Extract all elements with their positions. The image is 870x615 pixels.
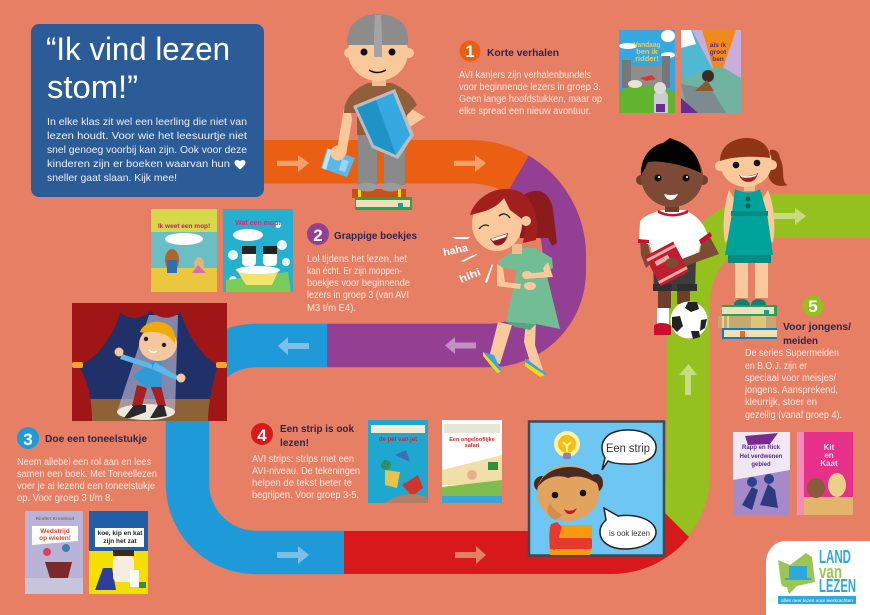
icon: shield (353, 89, 414, 159)
number badge (251, 423, 273, 445)
title: “Ik vind lezen (46, 31, 230, 67)
curtains (72, 303, 227, 421)
body text: gezellig (vanaf groep 4). (745, 410, 842, 421)
character: boy with book and ball (636, 138, 719, 339)
body text: jongens. Aansprekend, (744, 385, 838, 396)
book cover: de pet van jet (368, 420, 428, 503)
logo wordmark: van (819, 562, 842, 582)
intro text: snel genoeg voorbij kan zijn. Ook voor deze (47, 144, 247, 156)
number badge: 3 (23, 430, 33, 449)
book cover: Kit en Kaat (797, 432, 853, 515)
number badge: 4 (257, 426, 267, 445)
body text: samen een boek. Met Toneellezen (17, 469, 157, 480)
body text: boekjes voor beginnende (307, 278, 410, 289)
icon: tv-book (778, 553, 815, 594)
icon: soccer ball (670, 302, 708, 339)
intro text (47, 116, 247, 184)
step 2: grappige boekjes (151, 209, 417, 314)
book cover: Kit en Kaat: en (824, 451, 834, 460)
heading: lezen! (280, 437, 309, 449)
body text: AVI kanjers zijn verhalenbundels (459, 70, 591, 81)
heading: Doe een toneelstukje (45, 433, 147, 445)
logo wordmark: LAND (819, 547, 851, 567)
heading: Een strip is ook (280, 423, 354, 435)
body text: voor beginnende lezers in groep 3. (459, 82, 601, 93)
body text: Geen lange hoofdstukken, maar op (459, 94, 602, 105)
body text: kan écht. Er zijn moppen- (307, 266, 402, 277)
heading: Voor jongens/ (783, 321, 851, 333)
body text: op. Voor groep 3 t/m 8. (17, 493, 113, 504)
character: thinking boy (534, 465, 603, 555)
body text: voer je al lezend een toneelstukje (17, 481, 155, 492)
book cover: als ik groot ben: ben (712, 56, 724, 63)
step 3: toneelstukje (17, 427, 157, 594)
number badge (802, 296, 824, 316)
book cover: Het verdwenen gebied: gebied (751, 462, 771, 468)
laughing sounds: haha (442, 242, 469, 259)
book cover: Wedstrijd op wielen: Wedstrijd (40, 528, 70, 535)
road arrows (277, 155, 806, 564)
title: stom!” (47, 69, 138, 105)
book cover: als ik groot ben (681, 30, 741, 113)
book cover: Wat een mop (223, 209, 293, 292)
number badge (460, 40, 480, 62)
book cover: als ik groot ben: groot (710, 49, 727, 56)
speech bubble: is ook lezen: is ook lezen (609, 529, 650, 538)
spotlight (117, 315, 178, 412)
book cover: als ik groot ben: als ik (710, 42, 727, 49)
number badge: 2 (313, 226, 323, 245)
book cover: Vandaag ben ik ridder: ben ik (636, 47, 659, 56)
body text: kleurrijk, stoer en (745, 397, 817, 408)
body text (744, 348, 842, 421)
winding road path (188, 162, 870, 574)
book cover: Ik weet een mop (151, 209, 217, 292)
book cover: Een ongelooflijke safari: Een ongelooflijke (449, 437, 495, 443)
body text: begrijpen. Voor groep 3-5. (252, 490, 359, 501)
book cover: Vandaag ben ik ridder: Vandaag (634, 40, 661, 49)
body text (307, 254, 410, 314)
logo: Land van Lezen (766, 541, 870, 615)
number badge: 5 (808, 297, 818, 316)
title (46, 31, 230, 105)
book cover: Een ongelooflijke safari (442, 420, 502, 503)
stage illustration (72, 303, 227, 421)
book cover: Vandaag ben ik ridder (619, 30, 675, 113)
heading: Korte verhalen (487, 47, 559, 59)
speech bubble: een strip: Een strip (606, 443, 650, 455)
heading (783, 321, 851, 347)
character: knight with shield (321, 14, 425, 210)
body text: AVI-niveau. De tekeningen (252, 466, 360, 477)
icon: red book (645, 241, 689, 287)
book cover: Kit en Kaat: Kaat (820, 459, 838, 468)
step 4: een strip (251, 420, 502, 503)
body text (17, 457, 157, 504)
body text: speciaal voor meisjes/ (745, 373, 836, 384)
icon: light bulb (554, 431, 580, 459)
book cover: Wat een mop: Wat een mop! (235, 220, 281, 227)
heading: meiden (783, 335, 818, 347)
book cover: Koe, kip en kat: zijn het zat (103, 538, 137, 545)
logo tagline: alles over lezen voor leerkrachten (781, 598, 854, 603)
book cover: Het verdwenen gebied: Het verdwenen (740, 454, 783, 460)
icon: heart (234, 160, 246, 170)
number badge (17, 427, 39, 449)
body text: Neem allebei een rol aan en lees (17, 457, 151, 468)
step 5: voor jongens/meiden (733, 296, 853, 515)
body text: elke spread een nieuw avontuur. (459, 106, 591, 117)
book cover: Wedstrijd op wielen: Rindert Kromhout (36, 516, 75, 521)
book cover: Het verdwenen gebied (733, 432, 790, 515)
body text: M3 t/m E4). (307, 303, 356, 314)
body text: en B.O.J. zijn er (745, 361, 808, 372)
laughing sounds (442, 237, 493, 286)
body text (252, 454, 360, 501)
body text: De series Supermeiden (745, 348, 839, 359)
intro text: kinderen zijn er boeken waarvan hun (47, 158, 230, 170)
number badge (307, 223, 329, 245)
book cover: Vandaag ben ik ridder: ridder! (635, 54, 659, 63)
intro text: lezen houdt. Voor wie het leesuurtje niet (47, 130, 247, 142)
book cover: Koe, kip en kat (89, 511, 148, 594)
icon: stack of books (718, 305, 777, 339)
body text: AVI strips: strips met een (252, 454, 354, 465)
icon: blue book (321, 146, 355, 177)
intro text: In elke klas zit wel een leerling die niet van (47, 116, 247, 128)
body text (459, 70, 602, 117)
body text: lezers in groep 3 (van AVI (307, 290, 409, 301)
character: girl on books (715, 138, 788, 339)
heading (280, 423, 354, 449)
body text: Lol tijdens het lezen, het (307, 254, 407, 265)
book cover: Kit en Kaat: Kit (824, 443, 835, 452)
book cover: Wedstrijd op wielen: op wielen! (39, 535, 71, 542)
heading: Grappige boekjes (334, 230, 417, 242)
character: laughing girl (442, 189, 560, 377)
number badge: 1 (465, 42, 475, 61)
step 1: korte verhalen (459, 30, 741, 117)
book cover: Wedstrijd op wielen (25, 511, 83, 594)
book cover: de pet van jet: de pet van jet (379, 437, 417, 443)
logo wordmark (819, 547, 856, 596)
book cover: Het verdwenen gebied: Rapp en Rick (742, 445, 781, 451)
book cover: Een ongelooflijke safari: safari (465, 443, 480, 449)
intro panel (31, 24, 264, 197)
comic panel (529, 422, 664, 556)
book cover: Koe, kip en kat: koe, kip en kat (98, 530, 143, 537)
laughing sounds: hihi (458, 266, 483, 286)
body text: helpen de tekst beter te (252, 478, 352, 489)
character: acting boy (114, 322, 186, 418)
intro text: sneller gaat slaan. Kijk mee! (47, 172, 177, 184)
book cover: Ik weet een mop: Ik weet een mop! (158, 223, 210, 230)
